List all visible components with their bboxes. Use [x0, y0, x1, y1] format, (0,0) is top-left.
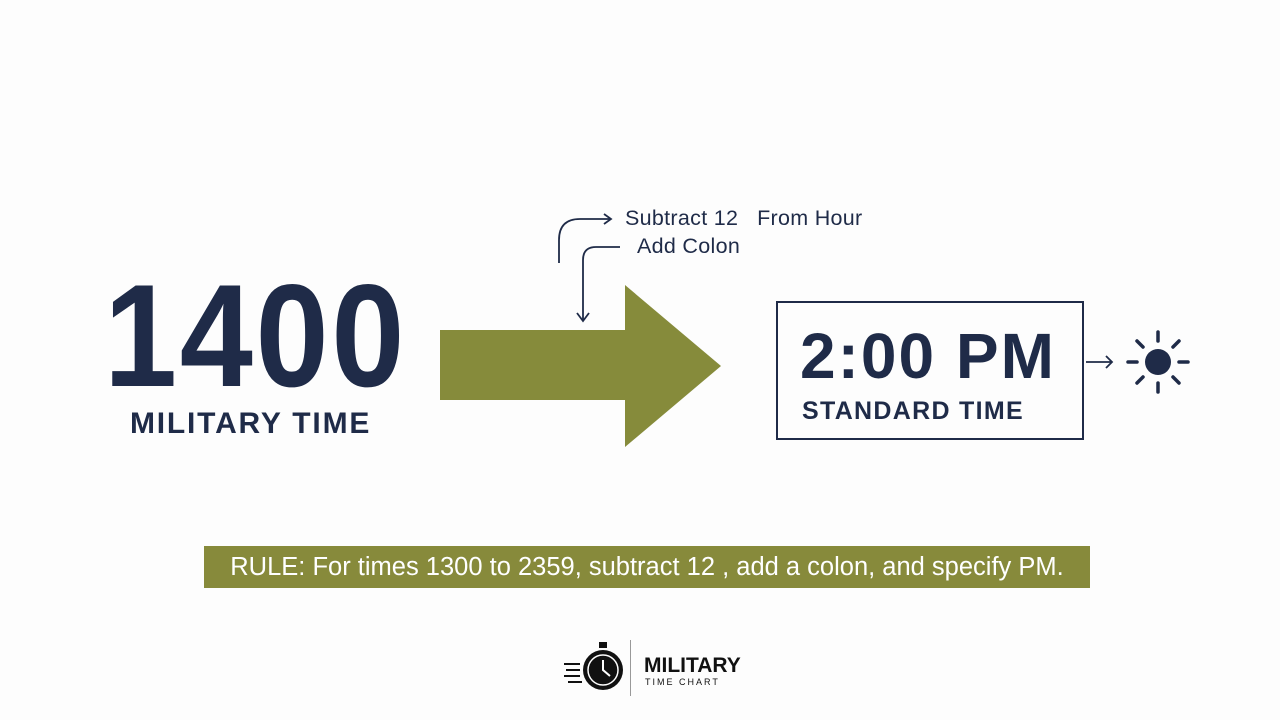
annotation: subtract 12: Subtract 12 From Hour [625, 206, 863, 230]
rule banner: RULE: For times 1300 to 2359, subtract 12 , add a colon, and specify PM. [230, 553, 1064, 581]
icon: sun [1126, 330, 1190, 394]
standard time box: 2:00 PM [800, 320, 1056, 392]
logo [564, 640, 741, 696]
standard time box: STANDARD TIME [802, 397, 1024, 425]
annotation: add colon: Add Colon [637, 234, 740, 258]
rule banner [204, 546, 1090, 588]
logo: TIME CHART [645, 677, 720, 687]
small arrow [1086, 355, 1114, 369]
big arrow [440, 285, 721, 447]
icon: stopwatch [564, 642, 623, 690]
standard time box [776, 301, 1084, 440]
military time number: 1400 [104, 254, 407, 417]
military time label: MILITARY TIME [130, 407, 371, 440]
logo text: MILITARY [644, 654, 741, 677]
annotation arrows [558, 213, 620, 322]
